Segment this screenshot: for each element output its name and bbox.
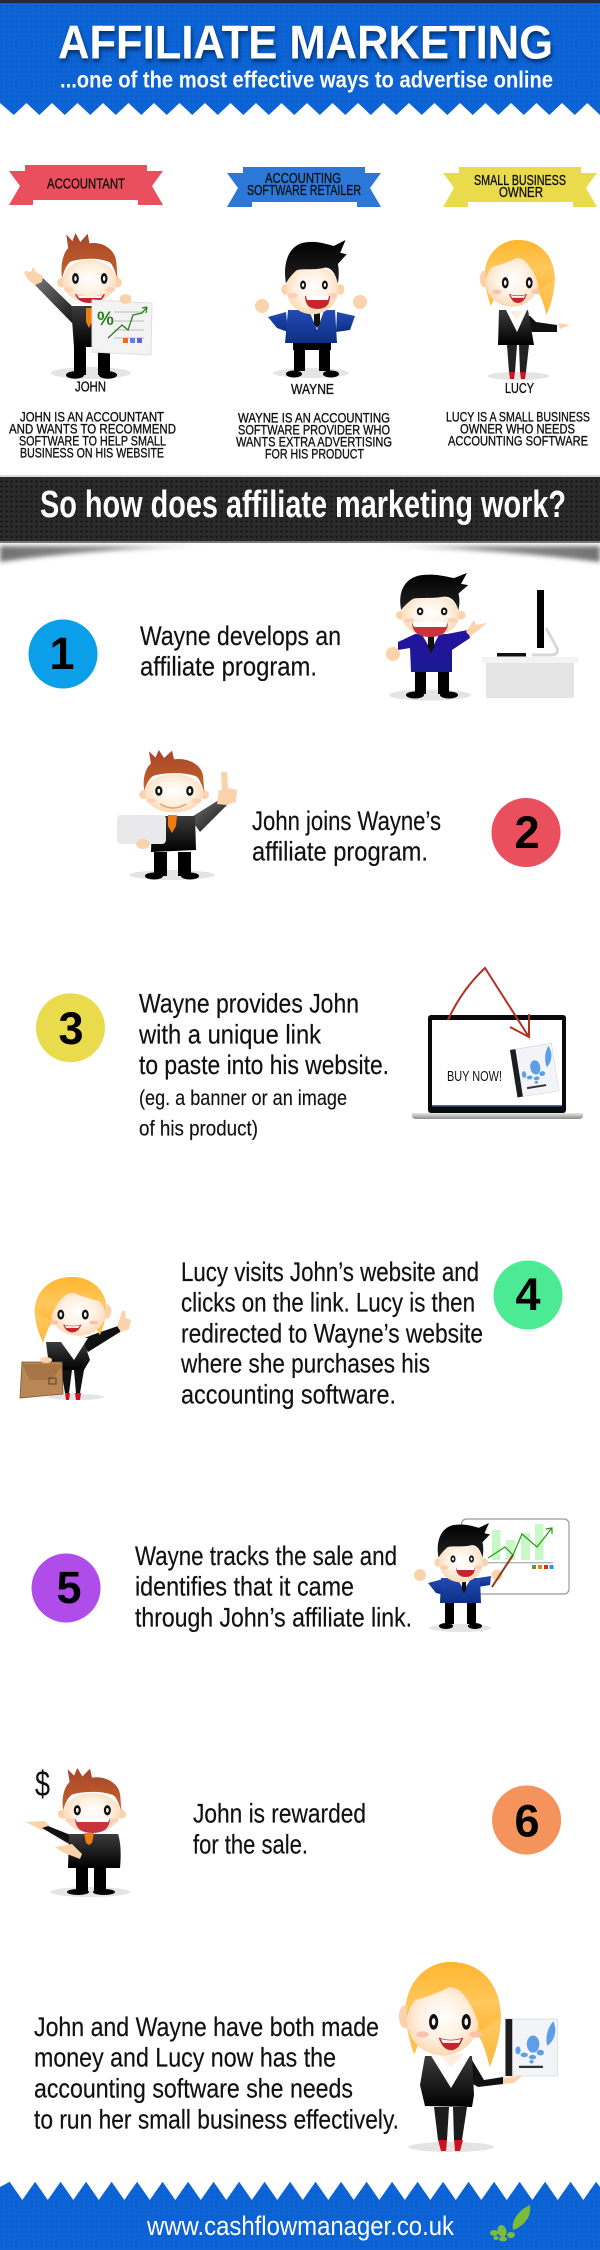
number badge 6 (492, 1786, 561, 1854)
step 3 text: to paste into his website. (139, 1050, 389, 1080)
banner label: BUY NOW! (447, 1068, 502, 1085)
icon: laptop with banner (412, 968, 583, 1119)
number badge 3: 3 (58, 1003, 84, 1054)
number badge 3 (36, 993, 105, 1062)
icon: software box (510, 1043, 559, 1097)
step 4 text: clicks on the link. Lucy is then (181, 1288, 475, 1318)
description: AND WANTS TO RECOMMEND (9, 422, 176, 437)
step 5 text: identifies that it came (135, 1572, 354, 1602)
step 1 text: affiliate program. (140, 652, 317, 682)
step 1 text (140, 621, 341, 682)
name: LUCY (505, 381, 534, 397)
arrow (448, 968, 529, 1037)
description: JOHN IS AN ACCOUNTANT (20, 410, 164, 425)
character: John with chart (24, 233, 152, 379)
ribbon: small business owner: SMALL BUSINESS (474, 172, 566, 189)
description: OWNER WHO NEEDS (460, 422, 575, 437)
step 6 text: John is rewarded (193, 1799, 366, 1829)
step 4 text: where she purchases his (180, 1349, 430, 1379)
chart sheet (92, 294, 152, 355)
step 3 text: (eg. a banner or an image (139, 1087, 347, 1110)
number badge 4: 4 (515, 1269, 541, 1320)
step 5 text: through John’s affiliate link. (135, 1603, 412, 1633)
step 2 text: affiliate program. (252, 837, 428, 867)
footer banner (0, 2182, 600, 2250)
step 4 text: accounting software. (181, 1379, 396, 1409)
description (446, 410, 590, 449)
conclusion text: accounting software she needs (34, 2073, 353, 2103)
chart sheet: % (97, 309, 114, 330)
ribbon: software retailer: ACCOUNTING (265, 170, 341, 187)
step 3 text (138, 989, 389, 1141)
step 6 text: for the sale. (193, 1829, 308, 1859)
icon: desk with computer (482, 590, 578, 698)
ribbon: software retailer (227, 167, 381, 207)
step 6 text (193, 1799, 366, 1859)
title: AFFILIATE MARKETING (58, 16, 553, 68)
website URL: www.cashflowmanager.co.uk (146, 2211, 454, 2241)
conclusion text: to run her small business effectively. (34, 2104, 399, 2134)
step 2 text (252, 806, 441, 867)
ribbon: accountant (9, 165, 163, 205)
description: SOFTWARE TO HELP SMALL (19, 434, 166, 449)
character: Wayne with pointer (414, 1523, 513, 1632)
panel: step 1 (28, 573, 578, 700)
character: Wayne (255, 240, 367, 378)
number badge 5: 5 (56, 1562, 82, 1613)
step 3 text: of his product) (139, 1118, 258, 1141)
step 4 text: Lucy visits John’s website and (181, 1257, 479, 1287)
description: BUSINESS ON HIS WEBSITE (20, 446, 164, 461)
step 5 text: Wayne tracks the sale and (135, 1541, 397, 1571)
description (9, 410, 176, 461)
step 4 text (180, 1257, 483, 1409)
ribbon: accountant: ACCOUNTANT (47, 176, 125, 192)
panel: Wayne profile (227, 167, 392, 462)
description (236, 411, 392, 462)
conclusion text: John and Wayne have both made (34, 2012, 379, 2042)
step 3 text: Wayne provides John (139, 989, 359, 1019)
ribbon: software retailer: SOFTWARE RETAILER (247, 182, 361, 199)
conclusion text (34, 2012, 399, 2134)
panel: step 4 (20, 1257, 562, 1409)
ribbon: small business owner: OWNER (499, 184, 543, 201)
number badge 4 (494, 1260, 562, 1330)
description: SOFTWARE PROVIDER WHO (238, 422, 390, 438)
step 3 text: with a unique link (138, 1019, 322, 1049)
description: WANTS EXTRA ADVERTISING (236, 434, 392, 450)
number badge 1 (28, 620, 98, 688)
panel: step 3 (36, 968, 583, 1141)
name: JOHN (75, 380, 106, 396)
dollar sign: $ (35, 1763, 50, 1804)
number badge 2: 2 (514, 807, 540, 858)
character: Lucy with briefcase (20, 1277, 131, 1400)
character: Lucy with software box (399, 1962, 558, 2152)
description: WAYNE IS AN ACCOUNTING (238, 411, 390, 426)
panel: step 6 (26, 1763, 561, 1897)
ribbon: small business owner (443, 167, 597, 207)
number badge 2 (492, 798, 560, 867)
section heading band (0, 475, 600, 562)
character: John thumbs up (117, 750, 237, 880)
panel: conclusion (34, 1962, 558, 2152)
number badge 1: 1 (49, 628, 75, 679)
name: WAYNE (291, 382, 334, 398)
panel: John profile (9, 165, 176, 461)
character: John rewarded (26, 1768, 130, 1897)
number badge 5 (32, 1554, 100, 1622)
step 4 text: redirected to Wayne’s website (181, 1318, 483, 1348)
step 2 text: John joins Wayne’s (252, 806, 441, 836)
step 1 text: Wayne develops an (140, 621, 341, 651)
character: Wayne presenting (386, 573, 487, 700)
icon: software box (506, 2019, 558, 2076)
chart board (462, 1519, 569, 1594)
step 5 text (135, 1541, 412, 1633)
panel: step 5 (32, 1519, 569, 1633)
conclusion text: money and Lucy now has the (34, 2043, 336, 2073)
icon: logo leaves (490, 2205, 530, 2242)
panel: Lucy profile (443, 167, 597, 449)
panel: step 2 (117, 750, 560, 880)
number badge 6: 6 (514, 1796, 540, 1846)
briefcase (20, 1357, 63, 1398)
description: FOR HIS PRODUCT (265, 446, 364, 462)
header banner (0, 0, 600, 115)
character: Lucy (480, 240, 570, 380)
